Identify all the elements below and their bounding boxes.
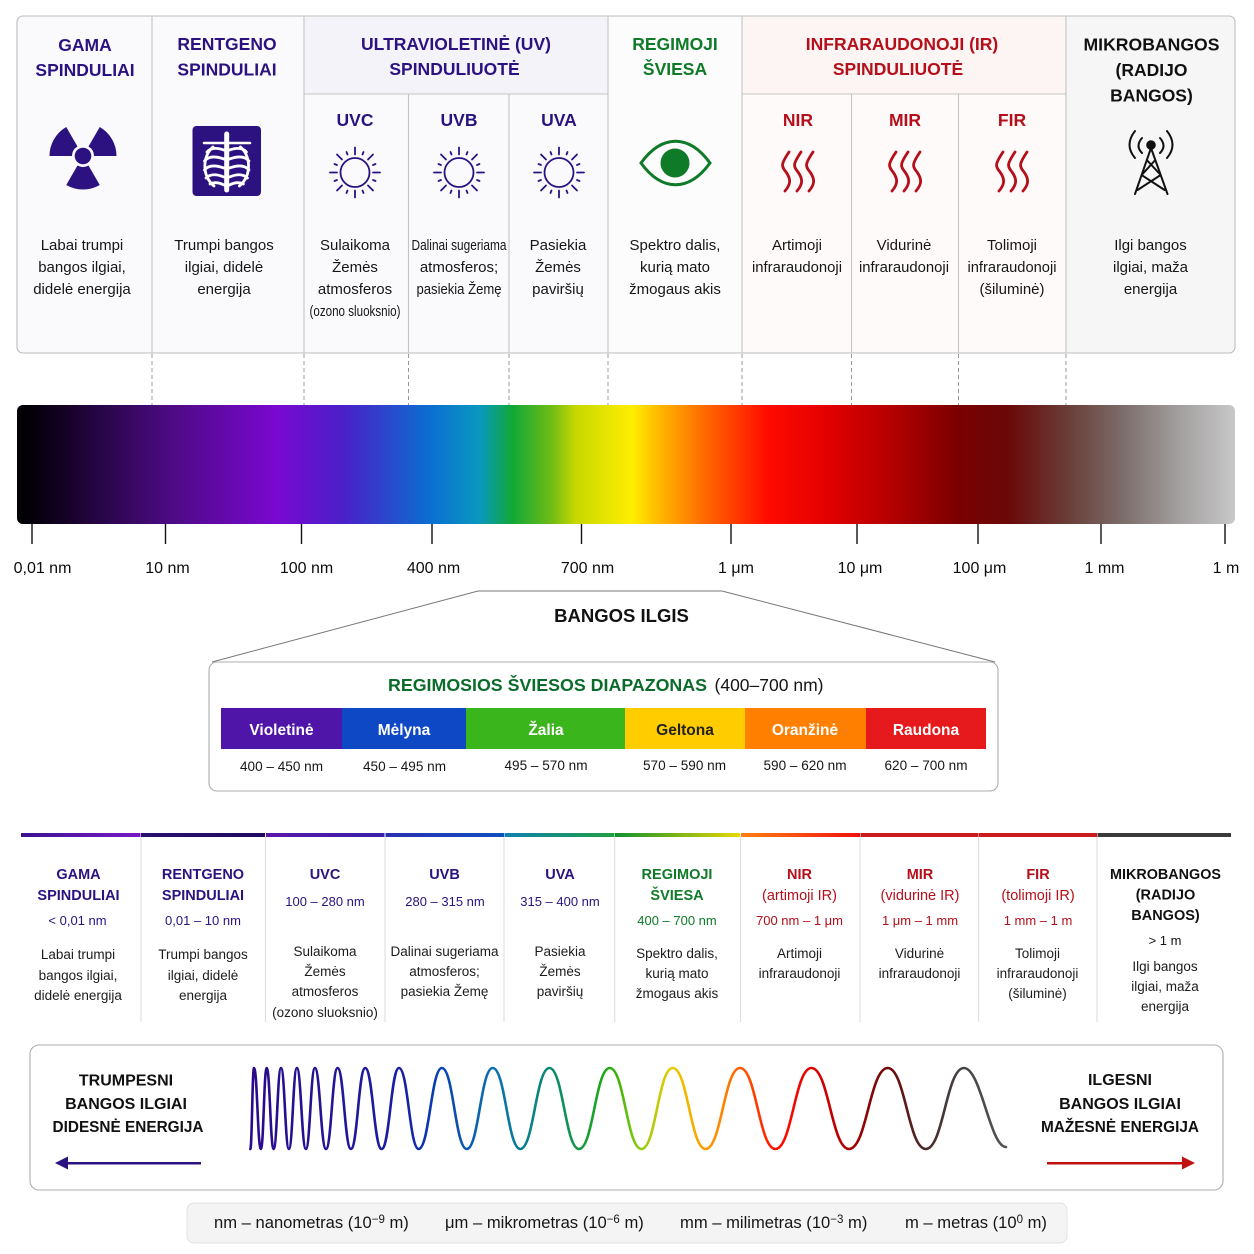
sub-column: UVB (412, 110, 507, 298)
text: UVA description: Pasiekia (530, 237, 586, 254)
cell: microwaves: MIKROBANGOS (1110, 867, 1221, 883)
band: violet (221, 708, 342, 749)
text: longer wavelengths: BANGOS ILGIAI (1059, 1096, 1181, 1113)
cell: UVB: atmosferos; (409, 964, 480, 979)
IR header background (742, 17, 1066, 94)
wavelength scale: 100 μm (953, 560, 1006, 577)
icon: eye (641, 141, 710, 185)
heading: x-rays: SPINDULIAI (177, 60, 277, 80)
text: NIR description: Artimoji (772, 237, 822, 254)
cell: UVA: Žemės (539, 964, 581, 979)
text: visible description: Spektro dalis, (630, 237, 720, 254)
text: NIR description: infraraudonoji (752, 259, 842, 276)
cell: gamma: GAMA (56, 867, 101, 883)
wavelength scale: 10 μm (838, 560, 882, 577)
heading: microwaves: MIKROBANGOS (1084, 34, 1220, 54)
column: microwaves (1084, 34, 1220, 298)
band: green (466, 708, 625, 749)
text: gamma description: Labai trumpi (41, 237, 123, 254)
heading: NIR: NIR (783, 110, 813, 130)
cell: x-rays (158, 867, 248, 1003)
icon: chest x-ray (192, 126, 261, 196)
cell: visible light (636, 867, 719, 1001)
band ranges: 570 – 590 nm (643, 757, 726, 773)
band ranges: 495 – 570 nm (504, 757, 588, 773)
legend item: micrometer: μm – mikrometras (10 (445, 1213, 607, 1232)
cell: microwaves: ilgiai, maža (1131, 979, 1199, 994)
icon: radio tower (1130, 131, 1172, 194)
wavelength scale: 1 μm (718, 560, 754, 577)
cell: UVA: UVA (545, 867, 575, 883)
legend item: millimeter: −3 (830, 1214, 843, 1226)
cell: UVC: Sulaikoma (293, 944, 357, 959)
band ranges: 400 – 450 nm (240, 758, 323, 774)
sub-column: UVC (310, 110, 401, 320)
cell: UVC (272, 867, 378, 1020)
heading: visible light: REGIMOJI (632, 34, 718, 54)
heading: visible light: ŠVIESA (643, 58, 707, 79)
heading: x-rays: RENTGENO (177, 34, 277, 54)
wavelength scale: 1 mm (1084, 560, 1124, 577)
cell: visible light: kurią mato (645, 966, 709, 981)
text: FIR description: Tolimoji (987, 237, 1037, 254)
panel frame (30, 1045, 1223, 1190)
text: visible description: kurią mato (640, 259, 710, 276)
band ranges: 620 – 700 nm (884, 757, 968, 773)
sub-column: UVA (530, 110, 587, 298)
cell: UVA: 315 – 400 nm (520, 894, 600, 909)
cell: MIR: MIR (907, 867, 933, 883)
text: FIR description: infraraudonoji (968, 259, 1056, 276)
heading: gamma: SPINDULIAI (35, 60, 135, 80)
band: violet: Violetinė (249, 722, 314, 739)
heading: ultraviolet: SPINDULIUOTĖ (389, 59, 520, 79)
cell: MIR: infraraudonoji (879, 966, 960, 981)
sub-column: NIR (752, 110, 842, 276)
cell: NIR: NIR (787, 867, 812, 883)
cell: gamma: didelė energija (34, 988, 122, 1003)
panel: detailed range table (21, 833, 1231, 1022)
zoom connector lines (212, 591, 995, 662)
text: gamma description: didelė energija (33, 281, 131, 298)
legend item: nanometer: nm – nanometras (10 (214, 1213, 372, 1232)
cell: FIR: (šiluminė) (1008, 986, 1067, 1001)
panel frame (209, 662, 998, 791)
cell: UVC: UVC (310, 867, 341, 883)
wavelength scale: 10 nm (145, 560, 190, 577)
text: UVC description: atmosferos (318, 281, 392, 298)
heading: infrared: INFRARAUDONOJI (IR) (806, 34, 998, 54)
column: x-rays (174, 34, 277, 298)
cell: UVC: 100 – 280 nm (285, 894, 365, 909)
wavelength scale: 0,01 nm (14, 560, 71, 577)
text: UVC description: Žemės (332, 259, 378, 276)
band: blue: Mėlyna (378, 722, 431, 739)
cell: FIR (997, 867, 1078, 1001)
icon: heat waves NIR (783, 152, 814, 191)
spectrum bar (17, 405, 1235, 524)
cell: NIR: (artimoji IR) (762, 888, 837, 904)
text: UVC description: Sulaikoma (320, 237, 390, 254)
legend: units (187, 1203, 1067, 1243)
text: FIR description: (šiluminė) (979, 281, 1045, 298)
heading: microwaves: BANGOS) (1110, 86, 1193, 106)
heading: gamma: GAMA (58, 35, 112, 55)
text: microwave description: ilgiai, maža (1113, 259, 1189, 276)
infrared column background (742, 17, 1066, 352)
text: UVB description: atmosferos; (420, 259, 498, 276)
cell: MIR: 1 μm – 1 mm (882, 913, 958, 928)
band ranges: 590 – 620 nm (764, 757, 846, 773)
cell: x-rays: 0,01 – 10 nm (165, 913, 241, 928)
cell: microwaves: > 1 m (1149, 933, 1181, 948)
heading: ultraviolet: ULTRAVIOLETINĖ (UV) (361, 34, 551, 54)
heading: FIR: FIR (998, 110, 1026, 130)
cell: UVA: Pasiekia (534, 944, 586, 959)
cell: gamma: Labai trumpi (41, 947, 115, 962)
panel background (17, 16, 1235, 353)
text: shorter wavelengths: DIDESNĖ ENERGIJA (52, 1118, 204, 1136)
cell: x-rays: ilgiai, didelė (168, 968, 238, 983)
wavelength scale: 400 nm (407, 560, 460, 577)
panel border (17, 16, 1235, 353)
legend item: meter: m – metras (10 (905, 1213, 1017, 1232)
text: UVB description: pasiekia Žemę (416, 281, 502, 298)
column group: infrared (752, 34, 1056, 298)
heading: infrared: SPINDULIUOTĖ (833, 59, 963, 79)
band ranges: 450 – 495 nm (363, 758, 446, 774)
cell: FIR: FIR (1026, 867, 1050, 883)
text: shorter wavelengths: TRUMPESNI (79, 1072, 173, 1090)
cell: FIR: 1 mm – 1 m (1004, 913, 1072, 928)
cell: microwaves: (RADIJO (1136, 888, 1195, 904)
text: microwave description: energija (1124, 281, 1178, 298)
legend item: nanometer: m) (385, 1213, 409, 1232)
UV header background (304, 17, 608, 94)
text: x-ray description: ilgiai, didelė (185, 259, 263, 276)
legend item: meter: m) (1023, 1213, 1047, 1232)
wavelength scale (14, 524, 1239, 577)
legend item: millimeter: m) (843, 1213, 867, 1232)
cell: UVC: (ozono sluoksnio) (272, 1005, 378, 1020)
text: gamma description: bangos ilgiai, (38, 259, 126, 276)
text: UVB description: Dalinai sugeriama (412, 237, 507, 254)
text: x-ray description: energija (197, 281, 251, 298)
heading: UVC: UVC (337, 110, 374, 130)
color header bars (21, 833, 1231, 837)
cell: x-rays: RENTGENO (162, 867, 244, 883)
cell: UVA: paviršių (537, 984, 583, 999)
panel: spectrum regions table (17, 16, 1235, 405)
band: blue (342, 708, 466, 749)
icon: heat waves MIR (890, 152, 921, 191)
icon: sun UVB (434, 148, 484, 198)
cell: FIR: Tolimoji (1015, 946, 1060, 961)
cell: x-rays: Trumpi bangos (158, 947, 248, 962)
text: microwave description: Ilgi bangos (1114, 237, 1187, 254)
legend item: micrometer: −6 (607, 1214, 620, 1226)
cell: NIR: Artimoji (777, 946, 822, 961)
cell: gamma: SPINDULIAI (37, 888, 120, 904)
cell: UVB: Dalinai sugeriama (390, 944, 499, 959)
cell: visible light: 400 – 700 nm (637, 913, 717, 928)
heading: UVB: UVB (441, 110, 477, 130)
icon: heat waves FIR (997, 152, 1028, 191)
legend item: micrometer: m) (620, 1213, 644, 1232)
sub-column: FIR (968, 110, 1056, 298)
wavelength scale: 100 nm (280, 560, 333, 577)
legend item: meter: 0 (1017, 1214, 1023, 1226)
wavelength scale: 1 m (1213, 560, 1239, 577)
text: longer wavelengths: MAŽESNĖ ENERGIJA (1041, 1117, 1199, 1136)
icon: sun UVC (330, 148, 380, 198)
cell: UVC: Žemės (304, 964, 346, 979)
cell: gamma: < 0,01 nm (48, 913, 107, 928)
cell: microwaves: energija (1141, 999, 1190, 1014)
band: yellow: Geltona (656, 722, 714, 739)
cell: visible light: REGIMOJI (642, 867, 712, 883)
column: visible light (629, 34, 721, 298)
cell: microwaves: BANGOS) (1131, 908, 1200, 924)
cell: visible light: Spektro dalis, (636, 946, 718, 961)
text: UVA description: paviršių (532, 281, 584, 298)
band: orange: Oranžinė (772, 722, 839, 739)
column: gamma rays (33, 35, 135, 298)
cell: MIR: Vidurinė (895, 946, 944, 961)
panel title: (400–700 nm) (714, 675, 824, 695)
cell: UVB: pasiekia Žemę (401, 984, 488, 999)
cell: MIR: (vidurinė IR) (881, 888, 959, 904)
cell: FIR: infraraudonoji (997, 966, 1078, 981)
microwave column background (1066, 17, 1234, 352)
band: red (866, 708, 986, 749)
panel title: REGIMOSIOS ŠVIESOS DIAPAZONAS (388, 674, 707, 695)
legend background (187, 1203, 1067, 1243)
legend item: nanometer: −9 (372, 1214, 385, 1226)
legend item: millimeter: mm – milimetras (10 (680, 1213, 830, 1232)
text: MIR description: Vidurinė (877, 237, 931, 254)
cell: visible light: žmogaus akis (636, 986, 719, 1001)
cell: NIR (756, 867, 843, 981)
heading: MIR: MIR (889, 110, 921, 130)
cell: UVB: UVB (429, 867, 460, 883)
cell: x-rays: SPINDULIAI (162, 888, 244, 904)
cell: UVB (390, 867, 499, 999)
text: UVA description: Žemės (535, 259, 581, 276)
cell: gamma (34, 867, 122, 1003)
cell: UVC: atmosferos (292, 984, 359, 999)
cell: NIR: 700 nm – 1 μm (756, 913, 843, 928)
icon: sun UVA (534, 148, 584, 198)
band ranges (240, 757, 968, 774)
sub-column: MIR (859, 110, 949, 276)
icon: radiation (50, 127, 116, 189)
text: longer wavelengths: ILGESNI (1088, 1072, 1152, 1089)
chart: chirped wave (250, 1068, 1006, 1149)
visible column background (608, 17, 742, 352)
cell: gamma: bangos ilgiai, (39, 968, 117, 983)
text: x-ray description: Trumpi bangos (174, 237, 274, 254)
cell: visible light: ŠVIESA (650, 886, 704, 904)
cell: MIR (879, 867, 960, 981)
text: UVC description: (ozono sluoksnio) (310, 303, 401, 320)
heading: microwaves: (RADIJO (1116, 60, 1187, 80)
cell: UVB: 280 – 315 nm (405, 894, 485, 909)
wavelength scale: 700 nm (561, 560, 614, 577)
heading: UVA: UVA (541, 110, 577, 130)
band: orange (745, 708, 866, 749)
cell: x-rays: energija (179, 988, 228, 1003)
arrow: left (55, 1156, 201, 1170)
text: MIR description: infraraudonoji (859, 259, 949, 276)
band: red: Raudona (893, 722, 960, 739)
cell: microwaves: Ilgi bangos (1132, 959, 1198, 974)
text: shorter wavelengths: BANGOS ILGIAI (65, 1096, 187, 1113)
cell: FIR: (tolimoji IR) (1001, 888, 1075, 904)
band: yellow (625, 708, 745, 749)
cell: NIR: infraraudonoji (759, 966, 840, 981)
column group: ultraviolet (310, 34, 587, 320)
panel: wavelength and energy comparison (30, 1045, 1223, 1190)
heading: wavelength: BANGOS ILGIS (554, 605, 689, 626)
band: green: Žalia (528, 721, 564, 739)
cell: microwaves (1110, 867, 1221, 1014)
text: visible description: žmogaus akis (629, 281, 721, 298)
panel: visible light range (209, 662, 998, 791)
cell: UVA (520, 867, 600, 999)
arrow: right (1047, 1156, 1195, 1170)
